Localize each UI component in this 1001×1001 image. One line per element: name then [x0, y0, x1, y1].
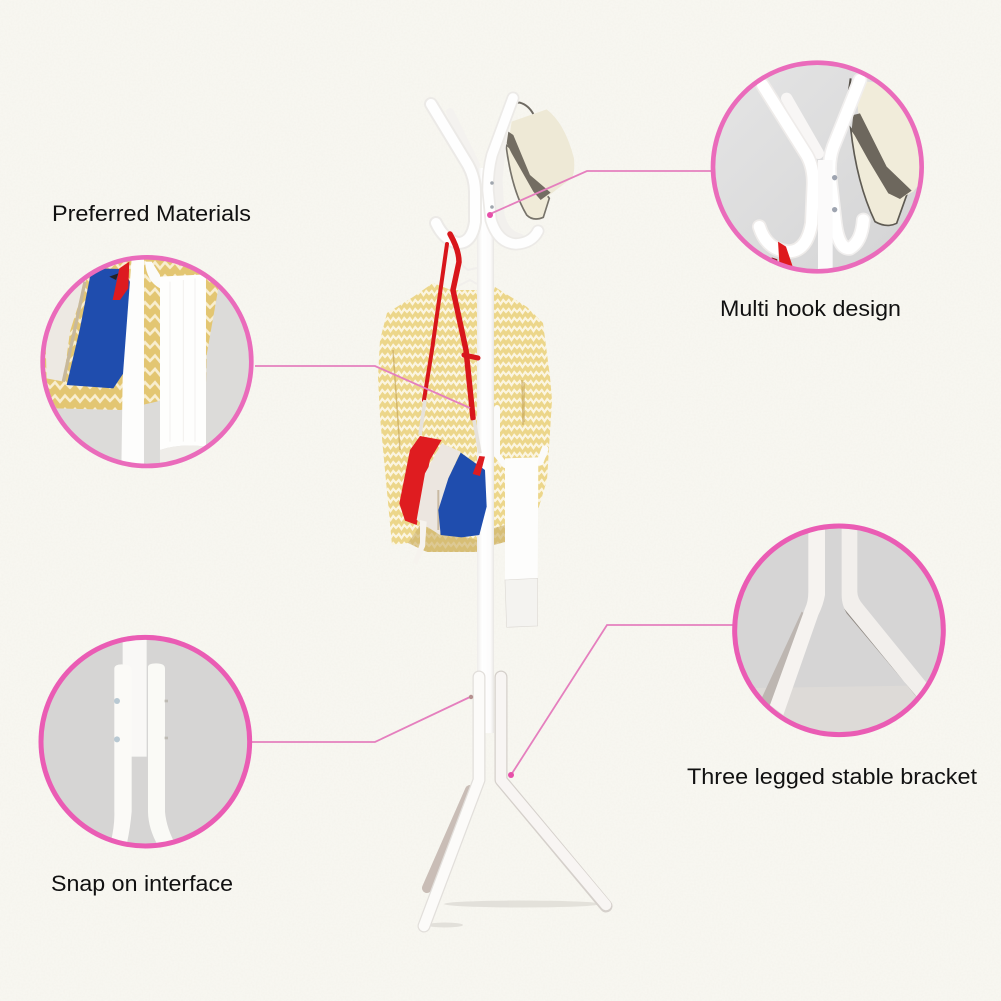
lower pegs [497, 408, 505, 465]
detail circle: multi hook design [710, 60, 924, 274]
label: snap on interface: Snap on interface [51, 871, 233, 896]
jacket [378, 283, 552, 552]
label: preferred materials: Preferred Materials [52, 201, 251, 226]
label: multi hook design: Multi hook design [720, 296, 901, 321]
hanger [458, 262, 477, 286]
callout lines [252, 171, 733, 775]
label: three legged stable bracket: Three legged stable bracket [687, 764, 977, 789]
callout dots [469, 212, 514, 778]
pole bolts [490, 181, 494, 185]
centre pole [477, 168, 494, 733]
floor shadow [427, 900, 600, 928]
hanging towel [505, 457, 538, 627]
callout line: tripod [511, 625, 733, 775]
coat stand [424, 98, 606, 926]
top branches and hooks [431, 98, 538, 244]
bag [399, 400, 487, 565]
front leg and base sleeve [424, 677, 479, 926]
hat [503, 103, 574, 219]
detail circle: preferred materials [40, 255, 254, 468]
red strap [424, 234, 478, 418]
right leg and base sleeve [501, 677, 606, 906]
back leg [427, 790, 470, 888]
callout line: materials [255, 366, 470, 408]
detail circle: snap on interface [38, 634, 252, 848]
callout line: snap on [252, 697, 470, 742]
detail circle: three legged bracket [732, 524, 946, 738]
callout line: multi hook [490, 171, 712, 214]
